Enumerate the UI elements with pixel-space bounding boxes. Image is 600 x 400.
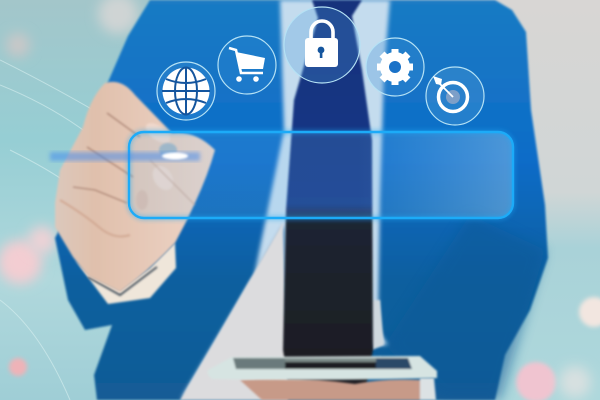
jacket right sleeve shading	[385, 215, 545, 400]
shirt	[180, 0, 390, 400]
icon: gear	[366, 38, 424, 96]
tie	[283, 0, 373, 392]
icon: padlock	[284, 7, 360, 83]
finger hand	[55, 82, 215, 292]
stylus tip	[159, 143, 177, 157]
light flare	[50, 152, 200, 161]
cuff	[75, 243, 176, 304]
shirt sliver bottom right	[372, 300, 384, 350]
icon: shopping cart	[218, 36, 276, 94]
icon: target with dart	[426, 67, 484, 125]
glowing input panel	[129, 132, 513, 218]
lower shirt	[180, 222, 288, 400]
cuff shadow	[88, 267, 157, 295]
holding fingers	[240, 378, 436, 400]
tablet	[208, 356, 437, 380]
icon: globe	[157, 62, 215, 120]
